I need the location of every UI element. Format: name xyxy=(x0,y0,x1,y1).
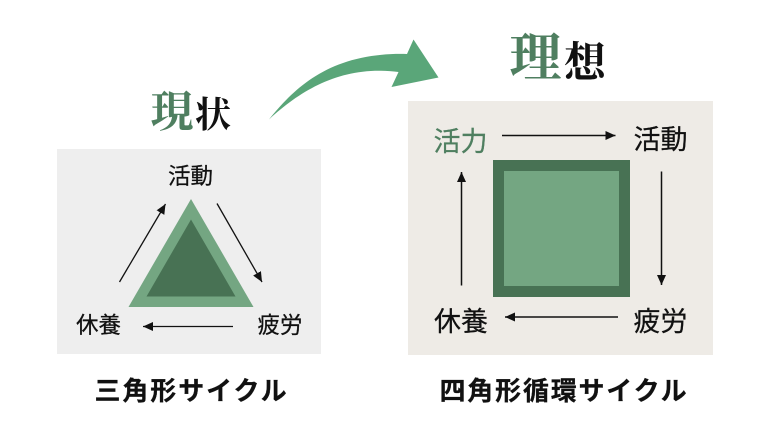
heading: current state xyxy=(150,90,232,137)
label: activity: 活動 xyxy=(168,164,213,189)
icon: inner square xyxy=(504,171,619,286)
arrow: fatigue to rest xyxy=(505,316,618,318)
icon: outer square xyxy=(493,160,630,297)
arrow: activity to fatigue xyxy=(217,204,262,282)
caption: square cycle: 四角形循環サイクル xyxy=(440,376,688,406)
icon: inner triangle xyxy=(146,220,236,296)
heading: ideal state: 理 xyxy=(510,31,562,88)
panel: square cycle xyxy=(408,101,713,355)
arrow: vitality to activity xyxy=(502,134,616,136)
arrow: rest to vitality xyxy=(460,172,462,286)
arrow: current to ideal xyxy=(269,40,438,120)
arrow: activity to fatigue xyxy=(660,172,662,285)
label: vitality: 活力 xyxy=(434,127,488,157)
caption: triangle cycle: 三角形サイクル xyxy=(94,376,289,406)
panel: triangle cycle xyxy=(57,149,321,354)
label: rest: 休養 xyxy=(434,307,488,337)
arrow: rest to activity xyxy=(120,204,166,282)
label: rest: 休養 xyxy=(76,313,121,338)
label: fatigue: 疲労 xyxy=(634,307,688,337)
label: activity: 活動 xyxy=(634,125,688,155)
heading: ideal state: 想 xyxy=(564,40,609,87)
heading: ideal state xyxy=(510,31,609,88)
icon: outer triangle xyxy=(128,199,254,307)
heading: current state: 現 xyxy=(150,90,194,137)
heading: current state: 状 xyxy=(195,95,232,135)
arrow: fatigue to rest xyxy=(143,326,233,328)
label: fatigue: 疲労 xyxy=(257,313,303,338)
